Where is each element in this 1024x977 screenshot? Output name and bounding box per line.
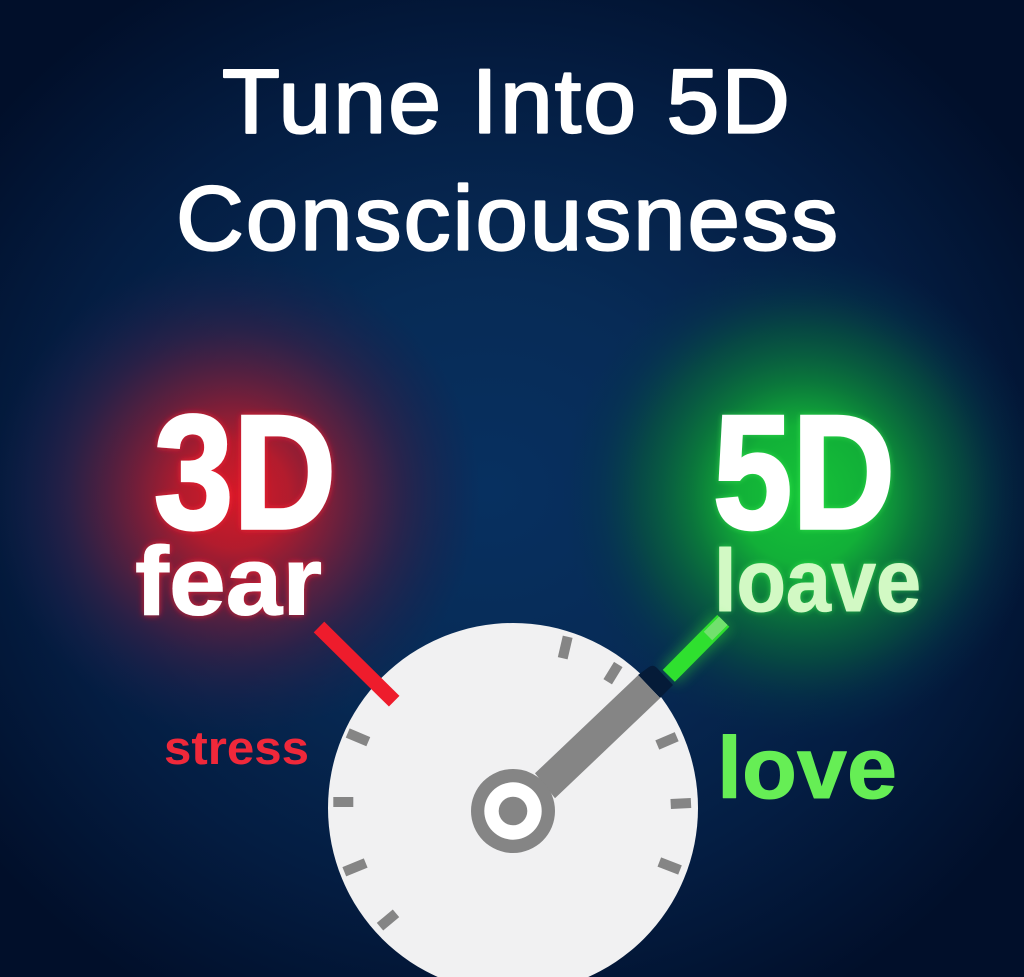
green indicator	[669, 621, 723, 676]
tick marks	[333, 637, 691, 927]
needle base shadow	[638, 666, 673, 698]
hub	[471, 769, 555, 853]
dial	[319, 621, 723, 977]
stress label: stress	[164, 721, 309, 774]
needle	[535, 675, 660, 798]
red indicator	[319, 627, 394, 701]
garbled love label: loave	[714, 531, 921, 630]
title	[176, 52, 840, 270]
title: Tune Into 5D	[222, 52, 792, 152]
fear label: fear	[135, 526, 322, 636]
5D label: 5D	[713, 382, 895, 563]
love label: love	[717, 720, 897, 817]
title: Consciousness	[176, 168, 840, 270]
red glow	[0, 255, 480, 735]
dial face	[328, 623, 698, 977]
3D label: 3D	[154, 382, 336, 563]
green glow	[563, 250, 1024, 740]
